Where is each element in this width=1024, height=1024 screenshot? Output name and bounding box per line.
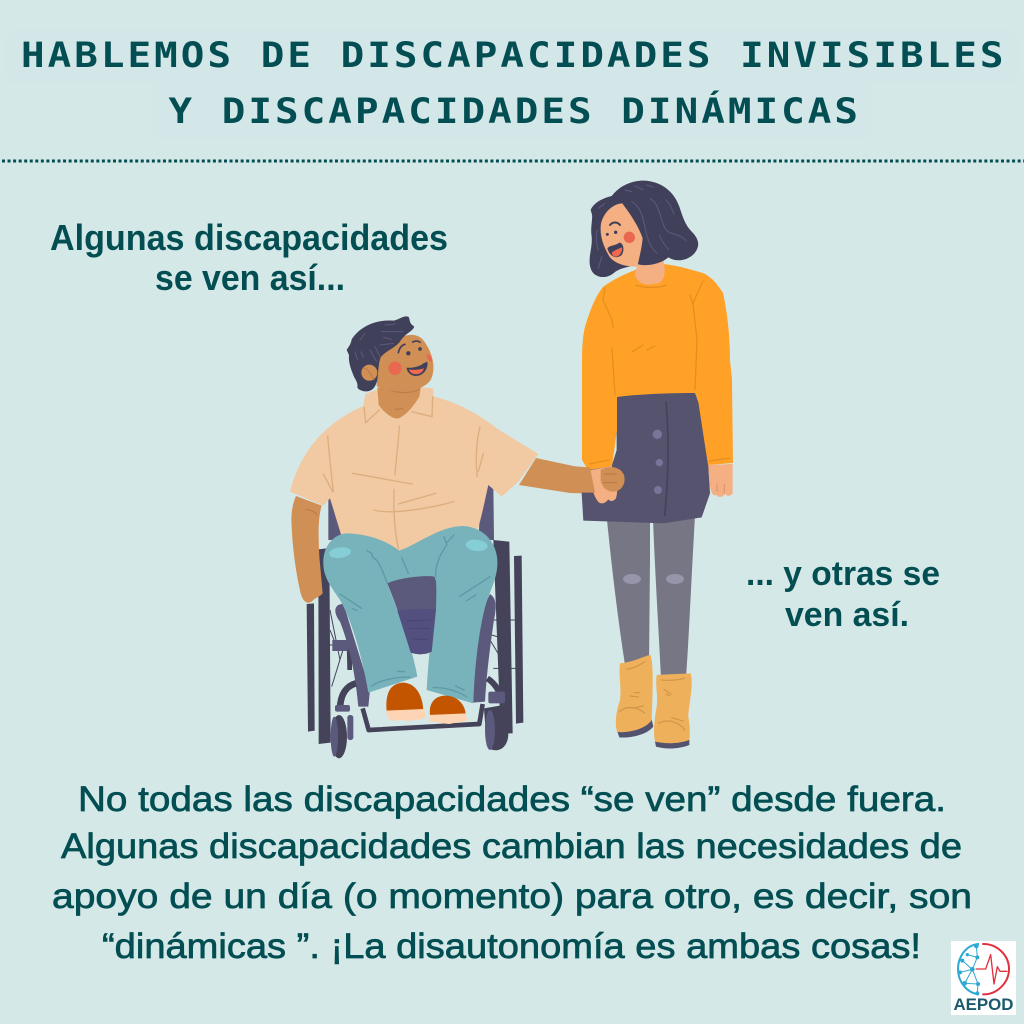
illustration: man in wheelchair [290,316,610,758]
text: and others look like this: ... y otras se [746,555,940,593]
boots [616,655,692,748]
title: Y DISCAPACIDADES DINÁMICAS [168,90,861,131]
body text [52,780,972,966]
shirt [290,387,538,553]
wheelchair [307,483,523,758]
logo: AEPOD: AEPOD [954,996,1014,1014]
legs [607,515,695,678]
body text: No todas las discapacidades “se ven” desde fuera. [78,780,946,819]
sweater [582,264,733,470]
man's left arm [291,496,323,603]
man's right arm [519,458,610,494]
hands [570,464,733,503]
title: HABLEMOS DE DISCAPACIDADES INVISIBLES [21,35,1007,75]
text: and others look like this: ven así. [785,596,909,634]
text: some disabilities look like this [50,217,448,298]
title [5,29,1019,139]
body text: apoyo de un día (o momento) para otro, es decir, son [52,877,972,916]
shoes [386,683,467,724]
man's head [347,316,433,391]
text: some disabilities look like this: Algunas discapacidades [50,217,448,258]
text: some disabilities look like this: se ven así... [155,257,345,298]
text: and others look like this [746,555,940,634]
woman's head [590,181,698,287]
body text: “dinámicas ”. ¡La disautonomía es ambas cosas! [102,927,921,966]
logo: AEPOD [951,941,1016,1015]
skirt [582,393,710,523]
illustration: standing woman [570,181,733,748]
jeans [323,526,497,724]
body text: Algunas discapacidades cambian las necesidades de [61,827,962,866]
